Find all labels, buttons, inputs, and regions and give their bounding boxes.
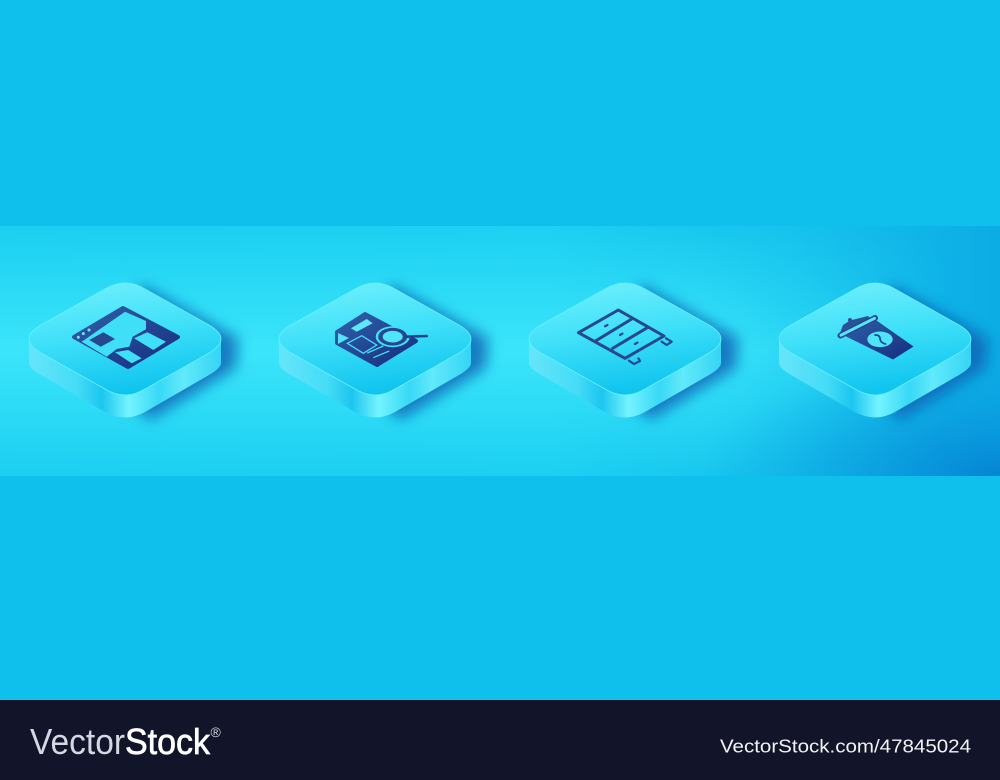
- tile top: [279, 283, 471, 395]
- tile 3 with cabinet icon: [529, 283, 721, 418]
- tile top: [779, 283, 971, 395]
- icon: document with magnifier: [337, 314, 427, 365]
- image id: VectorStock.com/47845024: [720, 736, 971, 756]
- tile top: [29, 283, 221, 395]
- tile top: [529, 283, 721, 395]
- icon: cabinet: [578, 310, 672, 364]
- footer bar: [0, 700, 1000, 780]
- tile side: [29, 341, 221, 418]
- tile side: [279, 341, 471, 418]
- infographic canvas: [0, 226, 1000, 780]
- tile side: [779, 341, 971, 418]
- tile side: [529, 341, 721, 418]
- tile 1 with browser layout icon: [29, 283, 221, 418]
- logo wordmark: Stock: Stock: [125, 721, 211, 762]
- logo wordmark: Vector: Vector: [30, 721, 125, 762]
- registered mark: ®: [210, 724, 222, 740]
- icon: coffee cup: [840, 316, 914, 360]
- tile 2 with document search icon: [279, 283, 471, 418]
- central band: [0, 226, 1000, 476]
- icon: browser layout: [74, 308, 178, 367]
- tile shadows: [125, 284, 988, 420]
- tile 4 with coffee cup icon: [779, 283, 971, 418]
